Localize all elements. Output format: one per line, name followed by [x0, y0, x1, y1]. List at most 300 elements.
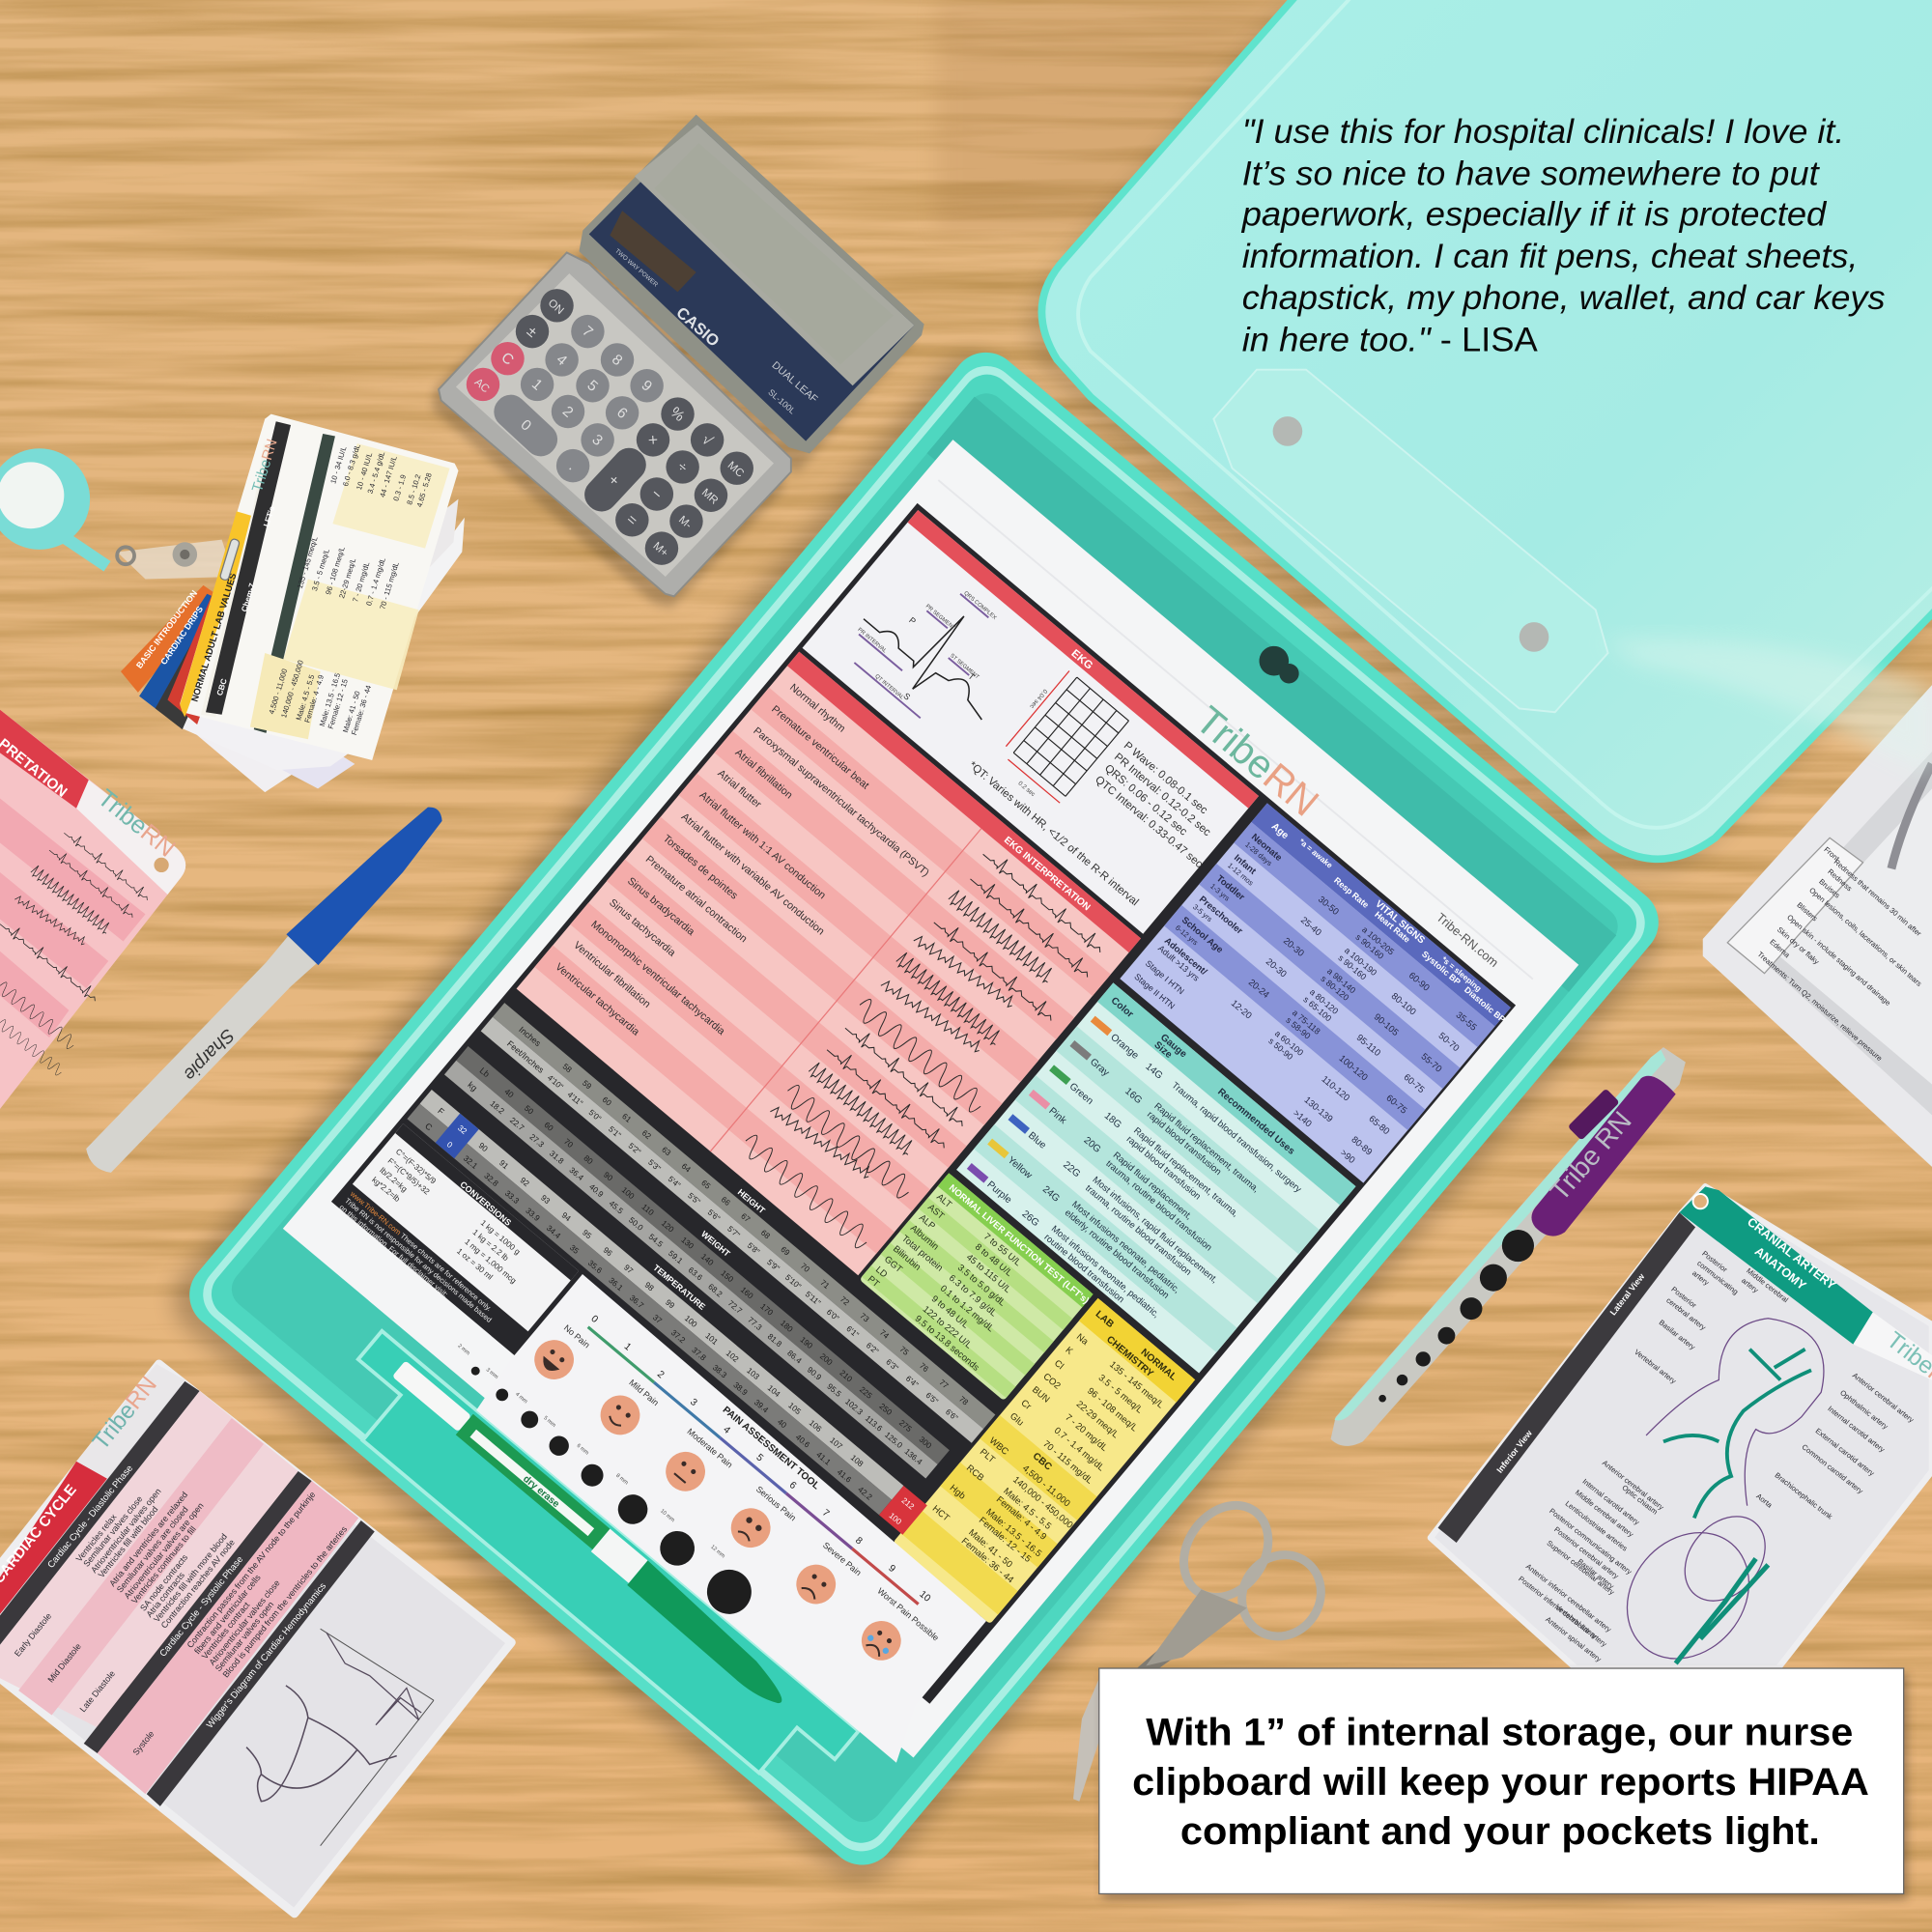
panel: IV gauge: rapid blood transfusion	[1124, 1134, 1203, 1202]
clipboard tray	[158, 332, 1680, 1896]
panel: pain assessment: Moderate Pain	[686, 1427, 734, 1469]
panel: height weight temperature table: 41.6	[836, 1467, 854, 1485]
card: skin assessment (upper right): Redness	[1826, 867, 1854, 893]
calculator keys	[467, 289, 753, 565]
panel: pain assessment: PAIN ASSESSMENT TOOL	[721, 1405, 821, 1492]
panel: liver function tests: 6.3 to 7.9 g/dL	[947, 1273, 999, 1319]
panel: height weight temperature table: 39.4	[753, 1397, 771, 1415]
card: skin assessment (upper right): Treatments: Turn Q2, moisturize, relieve pressure	[1756, 950, 1884, 1063]
panel: EKG interpretation: Sinus tachycardia	[607, 897, 678, 959]
panel: height weight temperature table: 5'9"	[765, 1257, 781, 1273]
panel: height weight temperature table: 5'6"	[706, 1208, 723, 1223]
callout: HIPAA storage: With 1” of internal storage, our nurse	[1146, 1711, 1853, 1754]
panel: vital signs: 1-3 yrs	[1208, 882, 1232, 903]
panel: EKG: EKG	[1068, 648, 1094, 672]
calculator keys: 0	[517, 416, 534, 435]
panel: IV gauge: 14G	[1143, 1062, 1164, 1082]
panel: IV gauge: Most infusions neonate, pediatric,	[1049, 1224, 1161, 1321]
panel: height weight temperature table: 6'3"	[884, 1357, 900, 1373]
panel: lab normals: CO2	[1041, 1372, 1063, 1392]
panel: conversions: 1 kg = 2.2 lb	[471, 1227, 511, 1263]
card: cardiac cycle (lower left): Mid Diastole	[45, 1641, 83, 1685]
panel: EKG: S	[901, 691, 912, 702]
panel: vital signs: a 80-120	[1308, 987, 1340, 1016]
card: cranial artery anatomy: Anterior cerebral artery	[1851, 1371, 1916, 1425]
calculator keys: C	[497, 350, 517, 369]
panel: height weight temperature table: 95	[581, 1228, 594, 1241]
panel: vital signs: >90	[1338, 1148, 1357, 1166]
card: cardiac cycle (lower left): Semilunar valves open	[213, 1600, 275, 1673]
panel: height weight temperature table: HEIGHT	[736, 1187, 767, 1216]
panel: conversions: F°=(C*9/5)+32	[386, 1156, 432, 1197]
panel: EKG: T	[966, 671, 977, 682]
panel: vital signs: 65-80	[1367, 1114, 1391, 1137]
panel: height weight temperature table: 100	[683, 1313, 699, 1329]
panel: EKG: QTC Interval: 0.33-0.47 sec	[1093, 774, 1205, 870]
card: skin assessment (upper right): Edema	[1768, 937, 1792, 960]
calculator keys: 3	[588, 432, 606, 449]
panel: EKG: P	[907, 615, 918, 626]
panel: EKG: QT INTERVAL	[873, 673, 904, 701]
panel: pain assessment: No Pain	[562, 1322, 592, 1350]
panel: vital signs: Age	[1269, 821, 1291, 841]
panel: IV gauge: Orange	[1108, 1033, 1141, 1062]
panel: lab normals: PLT	[978, 1447, 997, 1465]
panel: vital signs: 80-100	[1389, 991, 1418, 1017]
quote text: chapstick, my phone, wallet, and car keys	[1242, 279, 1886, 317]
panel: vital signs: 60-75	[1402, 1072, 1426, 1095]
card: cardiac cycle (lower left): Blood is pumped from the ventricles to the arteries	[220, 1524, 350, 1680]
panel: height weight temperature table: 18.2	[488, 1098, 507, 1116]
panel: height weight temperature table: 40.9	[587, 1181, 606, 1200]
panel: lab normals: 4,500 - 11,000	[1020, 1463, 1072, 1509]
card: cranial artery anatomy: Posterior	[1669, 1285, 1698, 1310]
panel: liver function tests: 9.5 to 13.8 seconds	[913, 1314, 981, 1374]
card: cardiac cycle (lower left): TribeRN	[88, 1372, 162, 1455]
panel: EKG: QRS: 0.06 - 0.12 sec	[1102, 762, 1189, 838]
panel: height weight temperature table: 67	[739, 1211, 753, 1224]
panel: height weight temperature table: 36.1	[607, 1275, 625, 1293]
panel: IV gauge: Trauma, rapid blood transfusion, surgery	[1170, 1080, 1303, 1195]
panel: EKG interpretation: Sinus bradycardia	[625, 875, 697, 939]
calculator keys: MC	[725, 460, 746, 480]
panel: height weight temperature table: 105	[786, 1401, 804, 1416]
panel: height weight temperature table: 73	[858, 1311, 871, 1324]
panel: height weight temperature table: 71	[818, 1277, 832, 1291]
panel: height weight temperature table: 5'11"	[804, 1289, 823, 1307]
stack of badge cards: 135 - 145 meq/L	[296, 535, 320, 589]
panel: lab normals: 70 - 115 mg/dL	[1040, 1438, 1094, 1487]
panel: pain assessment: Mild Pain	[627, 1378, 661, 1407]
panel: vital signs: School Age	[1179, 915, 1225, 955]
card: skin assessment (upper right): Open skin - include staging and drainage	[1785, 913, 1892, 1008]
card: cardiac cycle (lower left): Ventricles contract	[200, 1600, 252, 1661]
card: cranial artery anatomy: Superior cerebellar artery	[1546, 1539, 1616, 1597]
panel: height weight temperature table: 300	[918, 1435, 934, 1451]
panel: height weight temperature table: 250	[877, 1401, 895, 1417]
panel: liver function tests: 3.5 to 5.0 g/dL	[955, 1263, 1008, 1309]
card: cranial artery anatomy: ANATOMY	[1752, 1243, 1809, 1293]
calculator keys: 4	[553, 352, 570, 369]
card: cardiac cycle (lower left): Atria contracts	[144, 1570, 186, 1619]
calculator keys: 7	[579, 323, 596, 341]
panel: height weight temperature table: 69	[779, 1244, 792, 1258]
panel: height weight temperature table: 72.7	[726, 1298, 745, 1316]
panel: pain assessment: 9	[886, 1563, 897, 1575]
pupil gauge	[454, 1356, 760, 1623]
callout: HIPAA storage	[1099, 1668, 1907, 1899]
panel: vital signs: 95-110	[1354, 1033, 1382, 1059]
panel: vital signs: a 60-100	[1273, 1029, 1305, 1058]
panel: EKG interpretation: Torsades de pointes	[661, 833, 740, 902]
card: cardiac cycle (lower left): Contraction passes from the AV node to the purkinje	[185, 1490, 317, 1650]
panel: vital signs: 100-120	[1337, 1053, 1370, 1083]
panel: height weight temperature table: 63.6	[687, 1264, 705, 1283]
stack of badge cards: 4,500 - 11,000	[267, 668, 289, 715]
panel: height weight temperature table: 200	[818, 1351, 835, 1368]
calculator	[433, 115, 924, 608]
calculator keys: MR	[699, 487, 720, 507]
panel: EKG: *QT: Varies with HR, <1/2 of the R-R interval	[967, 759, 1141, 908]
panel: height weight temperature table: WEIGHT	[699, 1229, 732, 1259]
panel: height weight temperature table: 54.5	[647, 1232, 666, 1249]
panel: height weight temperature table: 36.4	[568, 1165, 586, 1182]
panel: IV gauge: Green	[1067, 1081, 1094, 1107]
clipboard lid (open)	[1030, 0, 1932, 874]
stack of badge cards: LFT's	[261, 504, 276, 528]
panel: vital signs: 6-12 yrs	[1174, 923, 1200, 947]
panel: vital signs: 1-12 mos	[1226, 861, 1255, 888]
panel: height weight temperature table: 5'2"	[627, 1141, 643, 1156]
stack of badge cards: NORMAL ADULT LAB VALUES	[189, 572, 239, 703]
panel: IV gauge	[956, 982, 1356, 1374]
panel: lab normals: Male: 41 - 50	[966, 1527, 1014, 1570]
panel: height weight temperature table: 100	[620, 1185, 637, 1201]
panel: liver function tests: ALP	[917, 1212, 937, 1232]
calculator keys: 2	[559, 403, 576, 421]
panel: IV gauge: Most infusions, rapid fluid replacement,	[1091, 1175, 1219, 1286]
panel: liver function tests: 0.1 to 1.2 mg/dL	[938, 1283, 996, 1334]
panel: height weight temperature table: 90.9	[806, 1365, 824, 1382]
panel: height weight temperature table: 225	[858, 1384, 874, 1401]
card: cardiac cycle (lower left): Ventricles continues to fill	[129, 1524, 198, 1605]
panel: height weight temperature table: 101	[703, 1330, 721, 1347]
panel: pain assessment: 6 mm	[576, 1443, 590, 1457]
logo	[1187, 697, 1512, 980]
panel: height weight temperature table: 76	[918, 1361, 931, 1374]
panel: height weight temperature table: 6'6"	[944, 1406, 960, 1423]
calculator: CASIO	[672, 303, 724, 351]
card: cranial artery anatomy: Common carotid artery	[1801, 1442, 1864, 1495]
panel: height weight temperature table: 66	[720, 1194, 733, 1208]
stack of badge cards: 3.5 - 5 meq/L	[310, 548, 331, 592]
stack of badge cards: 0.7 - 1.4 mg/dL	[364, 556, 387, 607]
panel: conversions: kg*2.2=lb	[370, 1175, 403, 1204]
panel: height weight temperature table: 5'1"	[607, 1123, 623, 1140]
panel: vital signs: s 90-160	[1353, 932, 1385, 961]
panel: IV gauge: Yellow	[1006, 1155, 1035, 1181]
panel: height weight temperature table: 59.1	[667, 1248, 685, 1265]
panel: lab normals: Female: 4 - 4.9	[994, 1494, 1048, 1543]
panel: EKG: PR INTERVAL	[856, 627, 888, 654]
panel: height weight temperature table: 37	[651, 1312, 665, 1325]
panel: height weight temperature table: 5'5"	[686, 1190, 702, 1207]
panel: EKG interpretation: Atrial fibrillation	[733, 747, 794, 802]
panel: lab normals: 0.7 - 1.4 mg/dL	[1052, 1426, 1106, 1473]
card: cardiac cycle (lower left): Semilunar valves are closed	[115, 1505, 190, 1594]
card: cranial artery anatomy: Inferior View	[1494, 1429, 1534, 1475]
card: cranial artery anatomy: Posterior	[1700, 1249, 1729, 1274]
panel: height weight temperature table: 150	[719, 1268, 736, 1284]
panel: vital signs: a 98-140	[1325, 966, 1357, 995]
calculator keys: 8	[609, 352, 625, 369]
panel: IV gauge: Gauge	[1158, 1033, 1189, 1061]
panel: height weight temperature table: 50.0	[627, 1215, 645, 1233]
card: cranial artery anatomy: Brachiocephalic trunk	[1774, 1471, 1834, 1521]
card: skin assessment (upper right): Skin dry or flaky	[1776, 925, 1821, 966]
panel: EKG interpretation	[517, 652, 1141, 1275]
quote text: "I use this for hospital clinicals! I love it.	[1242, 113, 1844, 151]
panel: vital signs: 60-90	[1406, 970, 1432, 994]
panel: liver function tests: ALT	[934, 1192, 953, 1210]
card: cranial artery anatomy: Optic chiasm	[1620, 1483, 1660, 1517]
stack of badge cards: 0.3 - 1.9	[391, 473, 408, 502]
panel: height weight temperature table: 160	[739, 1285, 755, 1301]
panel: vital signs: 50-70	[1436, 1031, 1461, 1054]
panel: height weight temperature table: 104	[766, 1383, 782, 1399]
panel: liver function tests: 45 to 115 U/L	[964, 1252, 1012, 1295]
stack of badge cards: CBC	[214, 677, 229, 696]
panel: lab normals: K	[1064, 1345, 1075, 1357]
panel: height weight temperature table: 6'4"	[904, 1374, 921, 1389]
keyhole slot	[1253, 640, 1306, 692]
panel: lab normals: Hgb	[948, 1483, 967, 1502]
panel: vital signs: *a = awake	[1297, 837, 1335, 870]
panel: vital signs: s 90-160	[1336, 952, 1368, 981]
logo: Tribe-RN.com	[1434, 910, 1501, 970]
panel: vital signs: Preschooler	[1197, 895, 1245, 937]
panel: height weight temperature table: 120	[660, 1218, 676, 1235]
panel: IV gauge: 20G	[1082, 1135, 1102, 1155]
panel: lab normals: Female: 12 - 15	[977, 1515, 1033, 1565]
card: cranial artery anatomy: Basilar artery	[1658, 1318, 1697, 1351]
card: cardiac cycle (lower left): Contraction reaches AV node	[159, 1538, 237, 1630]
panel: height weight temperature table: 32.1	[462, 1153, 480, 1171]
stack of badge cards: 3.4 - 5.4 g/dL	[366, 450, 386, 495]
panel: height weight temperature table: 5'4"	[667, 1174, 683, 1190]
panel: height weight temperature table: 70	[562, 1136, 576, 1150]
calculator keys: ON	[546, 298, 566, 317]
panel: pain assessment: 7	[820, 1508, 832, 1520]
panel: height weight temperature table: 34.4	[545, 1223, 563, 1240]
panel: pain assessment: 12 mm	[709, 1545, 726, 1560]
card: cranial artery anatomy: Ophthalmic artery	[1838, 1388, 1889, 1431]
panel: lab normals: RCB	[964, 1463, 986, 1484]
panel: height weight temperature table: 59	[581, 1078, 594, 1092]
panel: lab normals: 96 - 108 meq/L	[1085, 1386, 1140, 1434]
penlight	[1331, 1047, 1686, 1446]
stack of badge cards: Female: 36 - 44	[350, 684, 373, 736]
panel: IV gauge: 16G	[1122, 1086, 1144, 1106]
panel: pain assessment: 8	[853, 1535, 865, 1548]
card: cardiac cycle (lower left): Atrioventricular valves open	[89, 1487, 163, 1575]
card: cranial artery anatomy: Anterior cerebral artery	[1601, 1459, 1665, 1512]
panel: height weight temperature table: 35.6	[586, 1258, 605, 1275]
panel: EKG interpretation: EKG INTERPRETATION	[1002, 835, 1092, 913]
panel: height weight temperature table: 40	[776, 1417, 789, 1431]
panel: lab normals: Male: 4.5 - 5.5	[1001, 1486, 1053, 1532]
calculator keys: 9	[638, 377, 655, 395]
stack of badge cards: 44 - 147 IU/L	[378, 455, 399, 498]
panel: height weight temperature table: 27.3	[527, 1132, 547, 1150]
panel: height weight temperature table: 38.9	[731, 1379, 750, 1398]
calculator keys: %	[667, 404, 688, 425]
panel: lab normals: 140,000 - 450,000	[1010, 1474, 1075, 1531]
stack of badge cards: CARDIAC DRIPS	[158, 605, 205, 667]
card: cardiac cycle (lower left): Atria and ventricles are relaxed	[107, 1490, 189, 1588]
panel: height weight temperature table: 35	[568, 1242, 582, 1256]
card: cardiac cycle (lower left): Cardiac Cycle - Systolic Phase	[157, 1554, 245, 1659]
panel: height weight temperature table: 4'10"	[546, 1072, 565, 1092]
panel: lab normals: CBC	[1031, 1451, 1054, 1473]
disclaimer: on this information. For full disclaimer visit:	[337, 1203, 450, 1299]
panel: IV gauge: Rapid fluid replacement, trauma,	[1131, 1125, 1240, 1219]
panel: height weight temperature table: 180	[779, 1318, 795, 1334]
card: cardiac cycle (lower left): Systole	[130, 1729, 156, 1757]
panel: vital signs: 60-75	[1384, 1093, 1408, 1117]
panel: height weight temperature table: 61	[620, 1111, 634, 1124]
panel: EKG interpretation: Premature ventricular beat	[769, 703, 871, 791]
panel: IV gauge: routine blood transfusion	[1042, 1233, 1126, 1305]
stack of badge cards: Male: 4.5 - 5.5	[295, 673, 316, 722]
calculator keys: M+	[650, 540, 670, 559]
panel: height weight temperature table: 38.3	[711, 1362, 729, 1380]
panel: conversions	[353, 1123, 579, 1331]
panel: height weight temperature table: 130	[679, 1235, 696, 1251]
panel: vital signs: s 50-90	[1266, 1036, 1295, 1062]
card: skin assessment (upper right): Bruises	[1817, 877, 1842, 900]
quote text: paperwork, especially if it is protected	[1241, 195, 1828, 233]
panel: vital signs: Stage II HTN	[1132, 972, 1177, 1011]
card: cranial artery anatomy: Internal carotid artery	[1581, 1477, 1641, 1527]
panel: height weight temperature table: 68	[759, 1228, 773, 1241]
scissors	[1073, 1489, 1337, 1802]
panel: height weight temperature table: 212	[900, 1495, 917, 1512]
panel: EKG interpretation: Atrial flutter with 1:1 AV conduction	[697, 789, 828, 901]
card: cardiac cycle (lower left): Wigger's Diagram of Cardiac Hemodynamics	[205, 1581, 328, 1730]
card: cardiac cycle (lower left): Ventricles relax	[74, 1512, 119, 1564]
panel: vital signs: Adolescent/	[1162, 936, 1209, 978]
panel: pain assessment: 1	[622, 1342, 633, 1353]
card: cardiac cycle (lower left): Ventricles fill with blood	[97, 1504, 159, 1579]
panel: height weight temperature table: 77.3	[746, 1315, 764, 1332]
card: cranial artery anatomy: Aorta	[1754, 1492, 1775, 1510]
card: cranial artery anatomy	[1431, 1186, 1932, 1683]
panel: height weight temperature table: 6'2"	[865, 1340, 881, 1356]
panel: height weight temperature table: 5'8"	[746, 1240, 762, 1257]
panel: height weight temperature table: 37.2	[669, 1327, 688, 1346]
panel: vital signs	[1120, 803, 1514, 1185]
disclaimer: www.Tribe-RN.com These charts are for reference only.	[348, 1189, 494, 1313]
panel: lab normals	[893, 1298, 1195, 1624]
stack of badge cards: Male: 13.5 - 16.5	[318, 672, 342, 727]
card: cranial artery anatomy: communicating	[1695, 1259, 1740, 1296]
panel: liver function tests: 7 to 55 U/L	[981, 1232, 1023, 1268]
card: cardiac cycle (lower left): fibers and ventricular cells	[192, 1573, 263, 1656]
badge reel	[0, 448, 234, 579]
panel: height weight temperature table: 100	[887, 1511, 904, 1526]
card: EKG interpretation (left edge): TribeRN	[93, 784, 180, 863]
panel: lab normals: LAB	[1094, 1309, 1116, 1330]
panel: height weight temperature table: 6'5"	[923, 1390, 940, 1406]
panel: vital signs: Heart Rate	[1373, 909, 1412, 945]
panel: height weight temperature table: 93	[539, 1193, 553, 1206]
pain scale line	[588, 1327, 919, 1605]
panel: IV gauge: 18G	[1102, 1111, 1123, 1131]
card: skin assessment (upper right): Redness that remains 30 min after	[1833, 858, 1923, 938]
panel: height weight temperature table: 31.8	[548, 1149, 566, 1166]
panel: vital signs: 25-40	[1298, 915, 1323, 938]
panel: vital signs: s 58-90	[1284, 1015, 1313, 1041]
panel: height weight temperature table: 32	[456, 1122, 469, 1136]
panel: pain assessment	[434, 1242, 1008, 1763]
panel: height weight temperature table: 70	[799, 1261, 812, 1274]
card: cardiac cycle (lower left): SA node contracts	[138, 1552, 190, 1613]
panel: height weight temperature table: 99	[664, 1297, 677, 1311]
card: skin assessment (upper right): Front	[1822, 845, 1841, 864]
rhythm strips	[737, 845, 1113, 1251]
panel: height weight temperature table: 0	[445, 1140, 455, 1150]
card: cranial artery anatomy: Posterior communicating artery	[1548, 1507, 1634, 1577]
panel: EKG interpretation: Premature atrial contraction	[643, 854, 749, 945]
panel: height weight temperature table: 78	[957, 1394, 971, 1407]
calculator keys: √	[698, 432, 716, 449]
paper	[283, 436, 1578, 1758]
card: cranial artery anatomy: Vertebral artery	[1553, 1603, 1599, 1640]
panel: height weight temperature table: 50	[523, 1103, 536, 1117]
panel: IV gauge: 24G	[1040, 1184, 1062, 1205]
card: skin assessment (upper right): Open lesions, coils, lacerations, or skin tears	[1807, 886, 1923, 988]
panel: conversions: C°=(F-32)*5/9	[394, 1147, 439, 1186]
panel: height weight temperature table: 102.3	[843, 1397, 866, 1417]
panel: vital signs: Systolic BP	[1420, 949, 1463, 987]
panel: EKG	[803, 510, 1260, 934]
panel: height weight temperature table: 190	[798, 1335, 815, 1350]
panel: height weight temperature table: 97	[622, 1263, 636, 1276]
card: skin assessment (upper right): Blisters	[1795, 900, 1819, 923]
card: cranial artery anatomy: artery	[1690, 1268, 1711, 1288]
panel: height weight temperature table: 75	[897, 1344, 911, 1357]
panel: EKG interpretation: Monomorphic ventricular tachycardia	[588, 919, 727, 1038]
calculator: SL-100L	[766, 387, 797, 416]
panel: height weight temperature table: TEMPERATURE	[651, 1263, 707, 1312]
panel: height weight temperature table: Feet/Inches	[505, 1038, 546, 1075]
stack of badge cards: Female: 12 - 15	[327, 678, 350, 730]
printed chart	[289, 470, 1553, 1763]
panel: vital signs: Diastolic BP	[1463, 984, 1507, 1024]
panel: height weight temperature table: 33.9	[524, 1206, 542, 1223]
panel: IV gauge: Purple	[984, 1179, 1013, 1207]
panel: lab normals: 135 - 145 meq/L	[1107, 1359, 1166, 1410]
panel: IV gauge: rapid blood transfusion	[1145, 1110, 1223, 1178]
rivets	[1273, 416, 1548, 652]
card: EKG interpretation (left edge)	[0, 710, 185, 1109]
panel: conversions: 1 kg = 1000 g	[479, 1218, 523, 1257]
panel: height weight temperature table: 5'7"	[725, 1224, 742, 1239]
calculator: DUAL LEAF	[770, 359, 820, 406]
card: skin assessment (upper right)	[1703, 685, 1932, 1167]
card: cranial artery anatomy: Lenticulostriate arteries	[1564, 1499, 1630, 1553]
